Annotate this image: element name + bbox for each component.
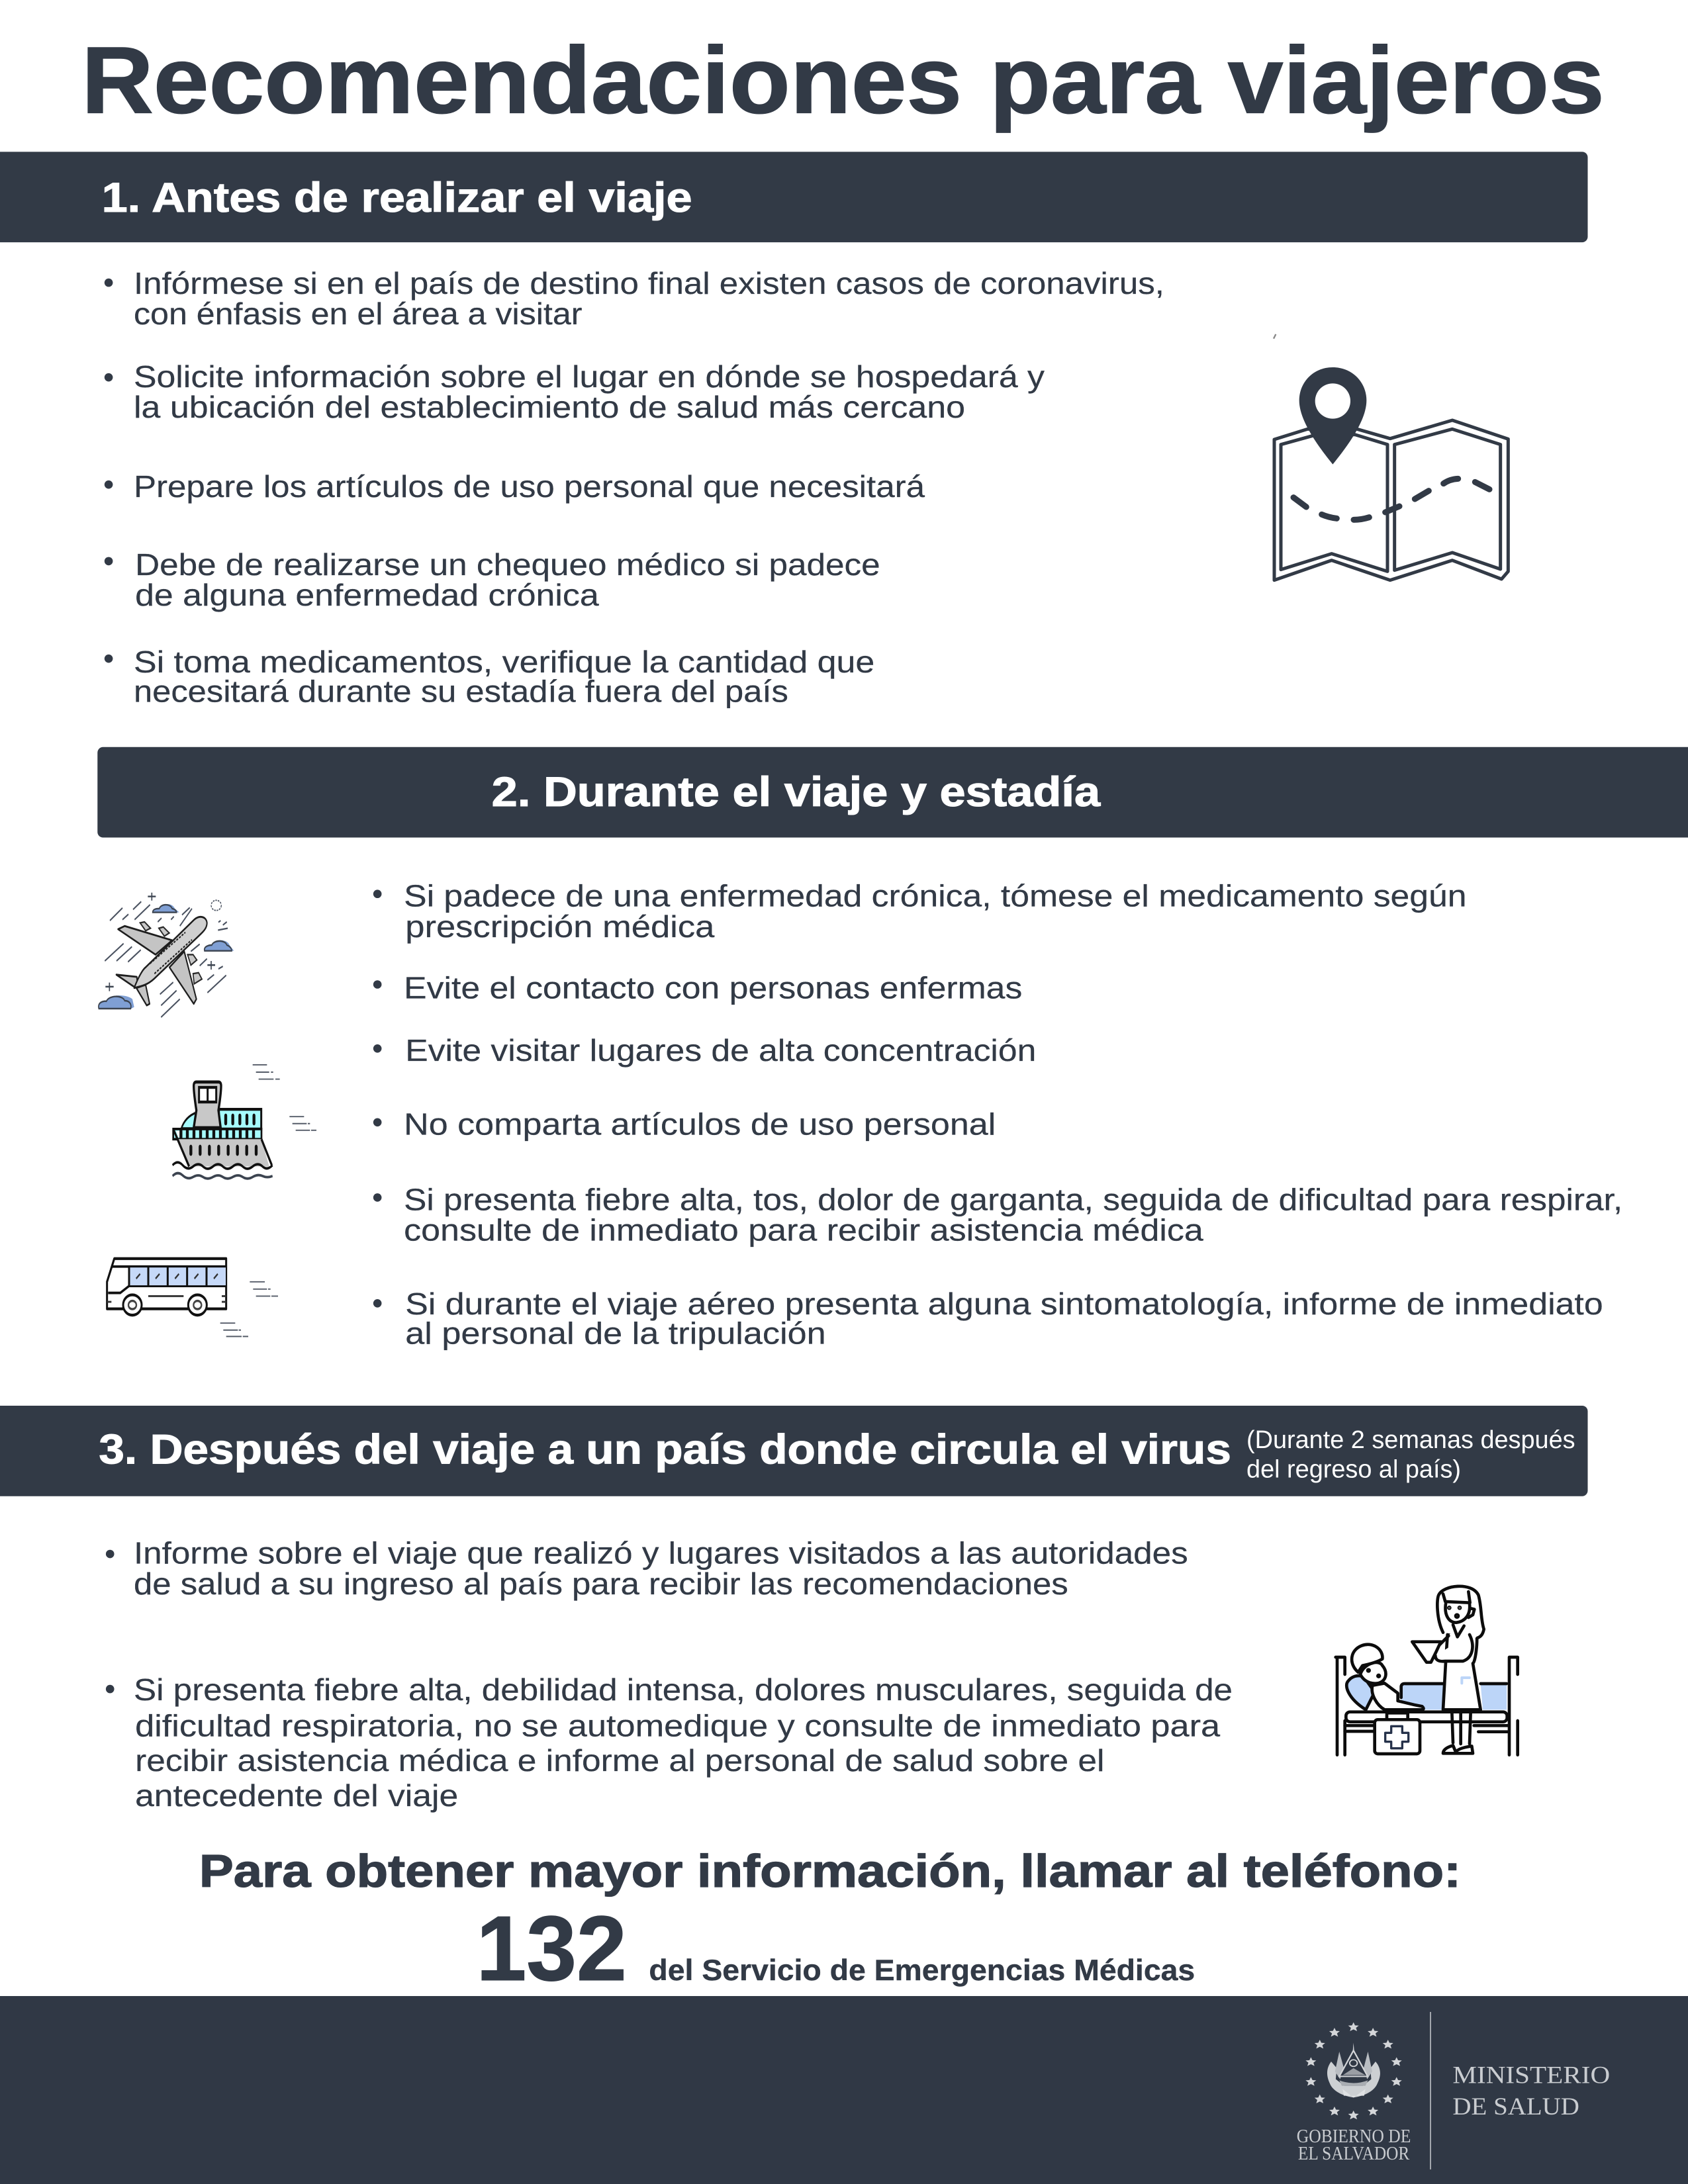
icon: bus <box>107 1259 278 1336</box>
icon: airplane <box>99 893 234 1017</box>
section 2 list: No comparta artículos de uso personal <box>404 1107 996 1142</box>
section 1 list: Si toma medicamentos, verifique la cantidad que <box>134 645 874 679</box>
section 3 list: antecedente del viaje <box>135 1778 458 1813</box>
section 2 list <box>373 879 1622 1350</box>
phone number: 132 <box>477 1897 627 2000</box>
section 2 heading: 2. Durante el viaje y estadía <box>492 769 1101 815</box>
logo: Gobierno de El Salvador <box>1297 2023 1411 2164</box>
icon: map with location pin <box>1274 334 1508 580</box>
section 3 heading note <box>1246 1426 1575 1483</box>
logo: Ministerio de Salud: DE SALUD <box>1452 2093 1579 2120</box>
section 3 list: de salud a su ingreso al país para recibir las recomendaciones <box>134 1567 1068 1601</box>
panel: section 3 <box>0 1406 1588 1813</box>
section 2 list: Si durante el viaje aéreo presenta alguna sintomatología, informe de inmediato <box>405 1287 1603 1321</box>
section 3 list <box>106 1536 1233 1813</box>
icon: doctor and patient <box>1336 1586 1518 1755</box>
section 1 list: Solicite información sobre el lugar en dónde se hospedará y <box>134 359 1045 394</box>
section 1 heading: 1. Antes de realizar el viaje <box>102 175 692 221</box>
logo wordmark <box>1297 2126 1411 2164</box>
section 3 heading note: (Durante 2 semanas después <box>1246 1426 1575 1454</box>
section 1 list: Prepare los artículos de uso personal que necesitará <box>134 469 925 504</box>
section 1 header bar <box>0 152 1588 242</box>
section 2 header bar <box>97 747 1688 838</box>
contact heading: Para obtener mayor información, llamar al teléfono: <box>199 1845 1461 1897</box>
section 3 list: Informe sobre el viaje que realizó y lugares visitados a las autoridades <box>134 1536 1188 1570</box>
section 1 list: Debe de realizarse un chequeo médico si padece <box>135 547 880 582</box>
logo wordmark: EL SALVADOR <box>1298 2144 1409 2164</box>
section 1 list: Infórmese si en el país de destino final existen casos de coronavirus, <box>134 266 1164 300</box>
section 2 list: al personal de la tripulación <box>405 1316 826 1350</box>
section 2 list: Si padece de una enfermedad crónica, tómese el medicamento según <box>404 879 1466 913</box>
section 1 list: la ubicación del establecimiento de salud más cercano <box>134 390 965 424</box>
section 3 list: Si presenta fiebre alta, debilidad intensa, dolores musculares, seguida de <box>134 1672 1233 1707</box>
section 1 list <box>105 266 1164 708</box>
section 1 list: con énfasis en el área a visitar <box>134 296 582 331</box>
section 2 list: prescripción médica <box>405 909 715 944</box>
section 3 header bar <box>0 1406 1588 1496</box>
section 3 list: recibir asistencia médica e informe al personal de salud sobre el <box>135 1743 1104 1778</box>
section 3 list: dificultad respiratoria, no se automedique y consulte de inmediato para <box>135 1709 1220 1743</box>
phone number caption: del Servicio de Emergencias Médicas <box>649 1954 1195 1987</box>
emblem with stars <box>1305 2023 1402 2119</box>
logo wordmark: GOBIERNO DE <box>1297 2126 1411 2147</box>
section 3 heading: 3. Después del viaje a un país donde circula el virus <box>99 1426 1231 1473</box>
section 1 list: necesitará durante su estadía fuera del país <box>134 674 788 708</box>
section 1 list: de alguna enfermedad crónica <box>135 578 599 612</box>
logo: Ministerio de Salud <box>1452 2062 1610 2120</box>
section 2 list: consulte de inmediato para recibir asistencia médica <box>404 1213 1203 1248</box>
logo divider <box>1430 2012 1431 2169</box>
panel: section 2 <box>97 747 1688 1350</box>
title: Recomendaciones para viajeros <box>81 27 1605 133</box>
icon: ship <box>173 1065 316 1179</box>
footer band <box>0 1996 1688 2184</box>
section 3 heading note: del regreso al país) <box>1246 1455 1461 1483</box>
section 2 list: Evite el contacto con personas enfermas <box>404 971 1022 1005</box>
logo: Ministerio de Salud: MINISTERIO <box>1452 2062 1610 2089</box>
section 2 list: Si presenta fiebre alta, tos, dolor de garganta, seguida de dificultad para respirar, <box>404 1182 1622 1216</box>
panel: section 1 <box>0 152 1588 708</box>
section 2 list: Evite visitar lugares de alta concentración <box>405 1033 1036 1068</box>
